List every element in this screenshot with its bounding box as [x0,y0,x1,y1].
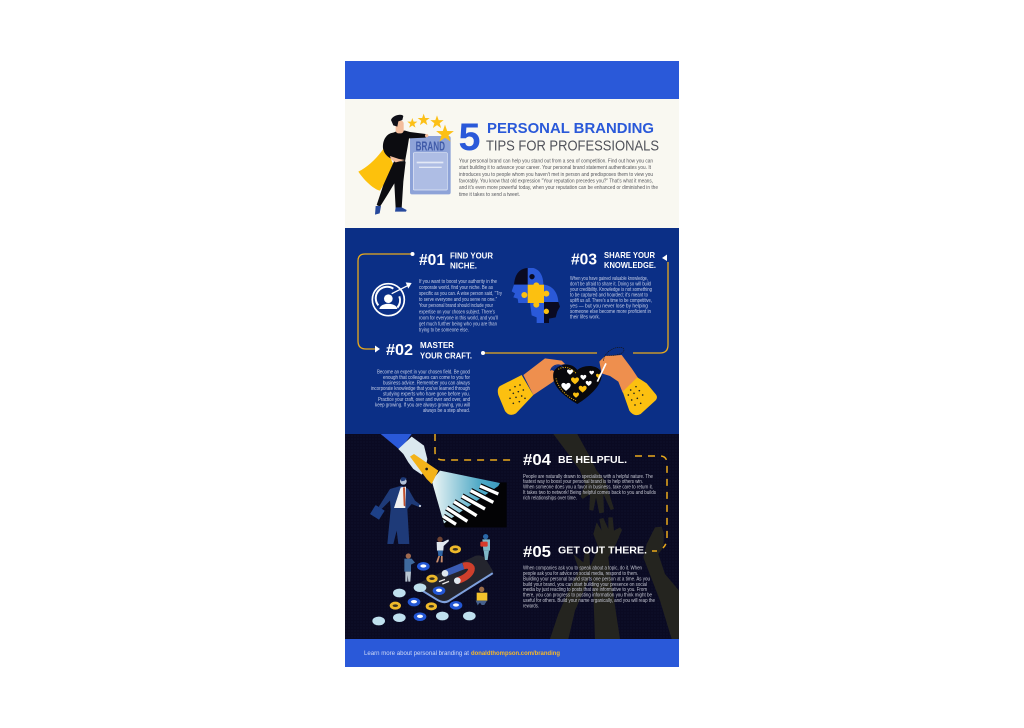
tip 02 heading: #02 [386,342,413,359]
person: seated with laptop [476,587,487,605]
tip 05 text: rewards. [523,603,539,609]
tip 05 text: media by just reacting to posts that are informative to you. From [523,587,647,593]
intro text: introduces you to people whom you haven't met in person and predisposes them to view you [459,172,653,178]
tip 02 text: business advice. Remember you can always [383,380,470,386]
tip 03 text: someone else become more proficient in [570,309,651,315]
tip 05 heading: #05 [523,544,551,561]
tip 04 heading: #04 [523,452,551,469]
tip 01 text: specific as you can. A wise person said, “Try [419,291,502,297]
person: woman with red folder [480,534,490,560]
illustration: phone magnet and social coins [372,534,493,625]
connector: dashed yellow line [435,434,667,551]
tip 03 heading [571,250,656,270]
tip 04 text: fastest way to boost your personal brand is to help others win. [523,479,643,485]
tip 04 text: It takes two to network! Being helpful comes back to you and builds [523,490,656,496]
tip 01 heading [419,250,493,270]
intro text [459,158,658,198]
tip 02 text: studying experts who have gone before you. [383,391,470,397]
tip 03 heading: KNOWLEDGE. [604,260,656,270]
top blue banner [345,61,679,99]
tip 01 heading: #01 [419,252,445,269]
tip 04 heading [523,452,627,469]
tip 04 text: When someone does you a favor in business, take care to return it. [523,485,653,491]
intro text: Your personal brand can help you stand out from a sea of competition. Find out how you can [459,158,653,164]
tip 01 heading: NICHE. [450,260,477,270]
tip 03 text: their lifes work. [570,314,600,320]
connector end markers [375,252,667,355]
tip 02 text: incorporate knowledge that you've learned through [371,386,470,392]
tip 03 text: yes — but you never lose by helping [570,303,648,309]
intro text: start building it to advance your career. Your personal brand statement authenticates you. It [459,165,652,171]
tip 03 heading: #03 [571,252,597,268]
tip 02 text: keep growing. If you are always growing, you will [375,402,470,408]
tip 02 heading: MASTER [420,340,454,350]
tip 04 text: rich relationships over time. [523,495,577,501]
illustration: puzzle heads [512,268,560,323]
tip 03 text: uplift us all. There's a time to be competitive, [570,298,652,304]
panel: tips 4 and 5 [345,434,679,639]
tip 02 text: always be a step ahead. [423,408,470,414]
footer banner: donaldthompson.com/branding [471,650,560,657]
tip 01 text: to serve everyone and you serve no one.” [419,297,497,303]
tip 03 text: When you have gained valuable knowledge, [570,276,648,282]
tip 05 text: When companies ask you to speak about a topic, do it. When [523,566,642,572]
tip 02 heading [386,340,472,360]
tip 02 text: enough that colleagues can come to you for [383,375,470,381]
intro text: favorably. You know that old expression "Your reputation precedes you?" That's what it means, [459,178,653,184]
tip 02 text: Become an expert in your chosen field. Be good [377,370,470,376]
heading: personal branding: PERSONAL BRANDING [487,120,654,137]
tip 05 heading: GET OUT THERE. [558,544,647,556]
tip 01 text: get much further being who you are than [419,322,497,328]
tip 05 heading [523,544,647,561]
tip 02 heading: YOUR CRAFT. [420,350,472,360]
icon: target and person [372,282,412,316]
illustration: superhero with brand board: BRAND [416,140,445,154]
tip 01 text [419,279,502,334]
tip 02 text [371,370,470,414]
tip 01 text: corporate world, find your niche. Be as [419,285,493,291]
footer banner [345,639,679,667]
intro text: time it takes to send a tweet. [459,192,520,198]
illustration: businessman with briefcase [370,477,422,544]
tip 03 text: your credibility. Knowledge is not something [570,287,652,293]
footer banner: Learn more about personal branding at [364,650,469,657]
tip 03 text [570,276,652,320]
heading: tips for professionals: TIPS FOR PROFESSIONALS [486,138,659,154]
panel: tips 1 to 3 [345,228,679,434]
connector arrows [358,254,668,353]
tip 05 text: useful for others. Build your name organically, and you will reap the [523,598,655,604]
tip 03 text: to be captured and hoarded; it's meant to [570,292,648,298]
tip 01 text: trying to be someone else. [419,328,469,334]
tip 04 text: People are naturally drawn to specialists with a helpful nature. The [523,474,653,480]
tip 01 text: expertise on your chosen subject. There's [419,309,495,315]
panel: introduction [345,99,679,228]
tip 05 text: there, you can progress to posting information you think might be [523,593,652,599]
tip 01 text: If you want to boost your authority in the [419,279,497,285]
person: woman waving [436,537,449,562]
shadow hands background [550,434,679,639]
tip 04 text [523,474,656,501]
tip 05 text: Building your personal brand starts one person at a time. As you [523,576,650,582]
tip 04 heading: BE HELPFUL. [558,454,627,466]
tip 01 text: room for everyone in this world, and you'll [419,315,498,321]
tip 05 text: people ask you for advice on social media, respond to them. [523,571,638,577]
tip 03 heading: SHARE YOUR [604,250,655,260]
tip 05 text [523,566,655,609]
tip 03 text: don't be afraid to share it. Doing so will build [570,281,651,287]
illustration: superhero with brand board [358,114,454,215]
person: man with phone [404,553,415,582]
heading number 5: 5 [458,116,480,159]
tip 01 heading: FIND YOUR [450,250,493,260]
tip 02 text: Practice your craft, over and over and over, and [378,397,470,403]
illustration: hands stitching a heart [498,347,657,415]
tip 05 text: build your brand, you can start building your presence on social [523,582,647,588]
intro text: and it's even more powerful today, when your reputation can be enhanced or diminished in the [459,185,658,191]
illustration: flashlight [381,434,507,527]
tip 01 text: Your personal brand should include your [419,303,493,309]
